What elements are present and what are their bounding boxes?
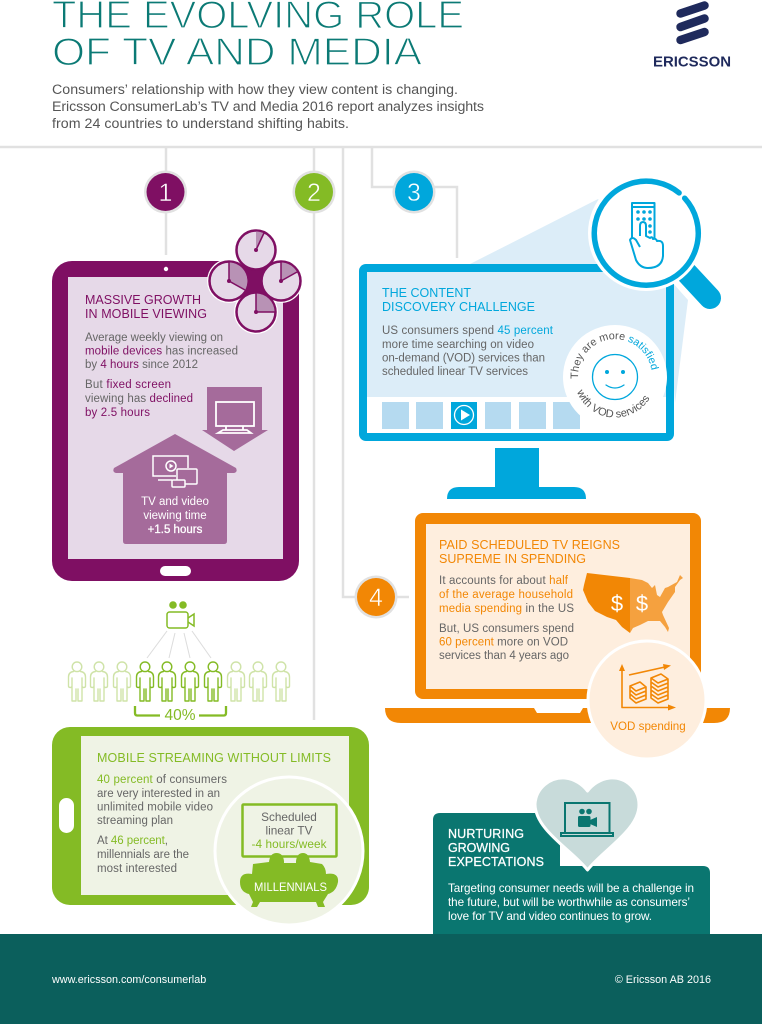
text: spending stats: of the average household [439,589,573,601]
text: streaming stats: 40 percent of consumers [97,774,227,786]
text: spending stats: 60 percent more on VOD [439,636,568,648]
panel: nurturing growing expectations [433,778,710,934]
callout: satisfied with VOD services [563,325,667,418]
heading: massive growth: MASSIVE GROWTH [85,293,201,307]
callout: VOD spending [588,641,706,759]
heading: content discovery: THE CONTENT [382,286,471,300]
footer: www.ericsson.com/consumerlab [51,974,206,986]
text: VOD search time: on-demand (VOD) services than [382,352,545,364]
icon: down arrow with TV [202,387,268,451]
thumbnails row [382,402,580,429]
monitor stand [447,448,586,499]
callout: millennials TV and sofa: Scheduled [261,810,317,824]
text: spending stats: But, US consumers spend [439,623,574,635]
text: mobile viewing stats: by 4 hours since 2012 [85,359,198,371]
text: streaming stats: streaming plan [97,815,173,827]
text: streaming stats: millennials are the [97,849,189,861]
icon: heart with laptop [535,778,639,870]
intro text: from 24 countries to understand shifting habits. [52,116,349,132]
heading: paid scheduled TV: PAID SCHEDULED TV REIGNS [439,538,620,552]
panel: beam of light behind monitor [470,199,688,403]
panel: tablet, massive growth in mobile viewing [52,228,303,581]
heading: nurturing: EXPECTATIONS [448,855,544,869]
callout: millennials TV and sofa [215,777,363,925]
text: mobile viewing stats: But fixed screen [85,379,171,391]
text: streaming stats: most interested [97,863,177,875]
callout: millennials TV and sofa: MILLENNIALS [254,882,327,894]
logo: Ericsson: ERICSSON [653,54,731,70]
callout: satisfied with VOD services: They are more satisfied [570,334,660,379]
heading: content discovery: DISCOVERY CHALLENGE [382,300,535,314]
step 1 marker: 1 [159,179,172,207]
icon: video camera [167,601,194,628]
icon: US map with dollars: $ [611,591,623,616]
bracket: 40%: 40% [164,707,196,724]
text: streaming stats: unlimited mobile video [97,802,213,814]
title: OF TV AND MEDIA [52,31,422,74]
people row, 40 percent highlighted [68,662,290,701]
callout: millennials TV and sofa: -4 hours/week [252,837,327,851]
footer: © Ericsson AB 2016 [615,974,711,986]
panel: phone, mobile streaming without limits [52,727,369,925]
text: nurturing body [448,882,694,923]
icon: house with devices: viewing time [143,510,207,522]
heading: paid scheduled TV: SUPREME IN SPENDING [439,552,586,566]
icon: house with devices: TV and video [141,496,209,508]
footer [0,934,762,1024]
icon: sofa [240,853,338,907]
heading: nurturing: NURTURING [448,827,524,841]
title [52,0,464,74]
step 2 marker [292,170,336,214]
step 1 marker [144,170,187,214]
callout: satisfied with VOD services: with VOD services [578,389,650,418]
icon: four clocks [207,228,303,334]
heading: nurturing: GROWING [448,841,510,855]
icon: house with devices [113,434,237,544]
text: spending stats [439,575,574,662]
text: streaming stats: are very interested in an [97,788,220,800]
step 2 marker: 2 [307,179,321,207]
text: streaming stats: At 46 percent, [97,835,168,847]
logo: Ericsson [653,6,731,70]
callout: millennials TV and sofa: linear TV [266,824,313,838]
icon: house with devices: +1.5 hours [148,524,203,536]
text: nurturing body: the future, but will be worthwhile as consumers’ [448,896,690,909]
heading: massive growth: IN MOBILE VIEWING [85,307,207,321]
text: nurturing body: love for TV and video continues to grow. [448,910,652,923]
panel: monitor, content discovery challenge [359,264,674,499]
panel: laptop, paid scheduled TV [385,513,730,759]
step 3 marker: 3 [407,179,421,207]
step 3 marker [392,170,436,214]
text: VOD search time [382,325,554,378]
text: VOD search time: more time searching on video [382,339,534,351]
text: VOD search time: US consumers spend 45 percent [382,325,554,337]
bracket: 40% [135,706,226,724]
heading: nurturing [448,827,544,869]
step 4 marker [354,576,398,618]
heading: paid scheduled TV [439,538,620,566]
text: mobile viewing stats: viewing has declined [85,393,193,405]
heading: mobile streaming: MOBILE STREAMING WITHOUT LIMITS [97,751,331,765]
text: spending stats: It accounts for about half [439,575,569,587]
heading: content discovery [382,286,535,314]
icon: magnifying glass with remote [588,175,710,298]
icon: US map with dollars: $ [636,591,648,616]
step 4 marker: 4 [369,584,383,612]
icon: US map with dollars [583,573,683,633]
text: mobile viewing stats: by 2.5 hours [85,407,150,419]
intro text [52,82,484,132]
text: spending stats: media spending in the US [439,603,574,615]
text: nurturing body: Targeting consumer needs will be a challenge in [448,882,694,895]
text: VOD search time: scheduled linear TV services [382,366,528,378]
text: mobile viewing stats: mobile devices has increased [85,346,238,358]
text: spending stats: services than 4 years ago [439,650,569,662]
heading: massive growth [85,293,207,321]
callout: VOD spending: VOD spending [610,720,686,733]
intro text: Ericsson ConsumerLab’s TV and Media 2016 report analyzes insights [52,99,484,115]
text: mobile viewing stats [85,332,238,419]
text: mobile viewing stats: Average weekly viewing on [85,332,223,344]
text: streaming stats [97,774,227,875]
intro text: Consumers’ relationship with how they view content is changing. [52,82,458,98]
